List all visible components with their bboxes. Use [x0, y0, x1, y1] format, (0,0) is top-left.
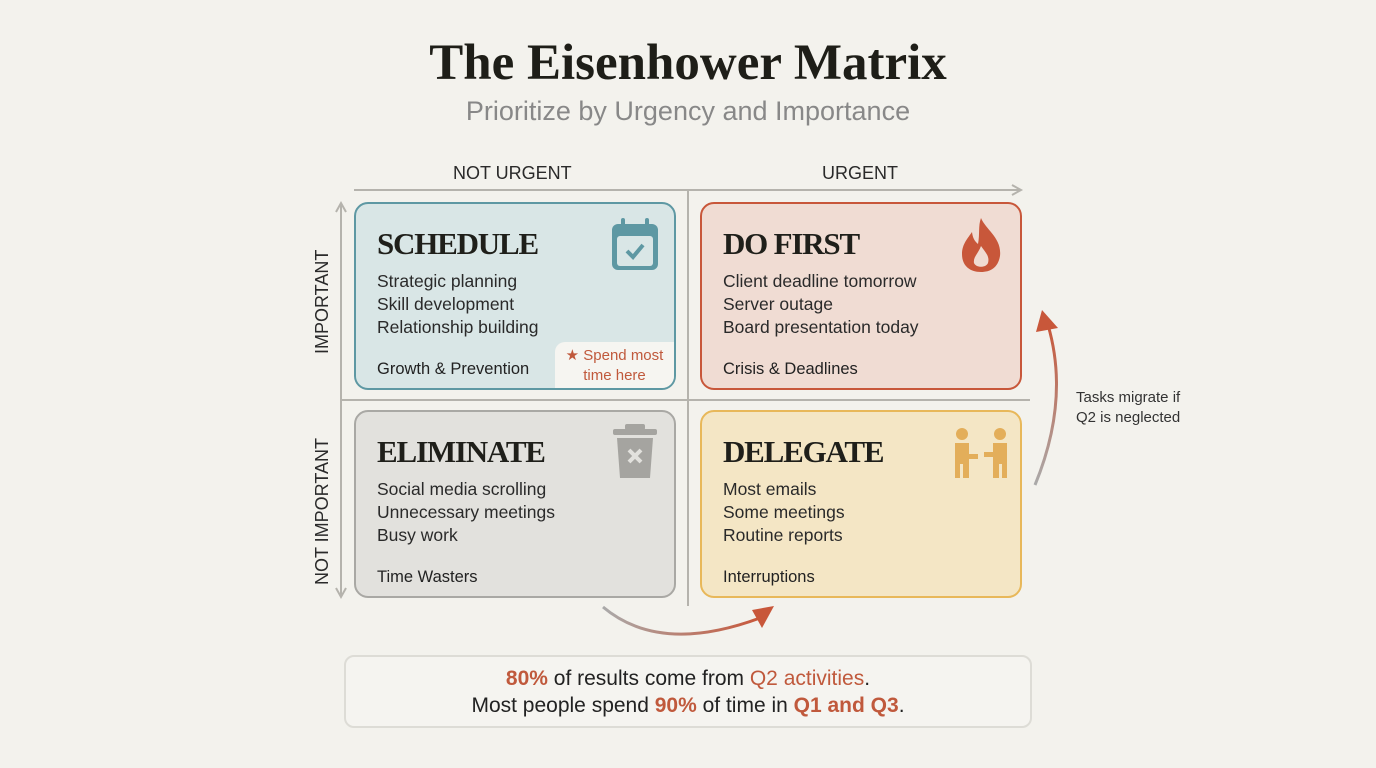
- panel: eliminate: Time Wasters: [377, 568, 478, 586]
- panel: eliminate: Busy work: [377, 525, 458, 545]
- panel: schedule: Growth & Prevention: [377, 360, 529, 378]
- panel: do first: [700, 202, 1022, 390]
- icon: people: [955, 428, 1007, 478]
- panel: do first: Client deadline tomorrow: [723, 271, 917, 291]
- bottom callout: 80% of results come from Q2 activities.: [506, 667, 870, 690]
- panel: do first: Board presentation today: [723, 317, 919, 337]
- panel: eliminate: Unnecessary meetings: [377, 502, 555, 522]
- panel: delegate: [700, 410, 1022, 598]
- callout: ★ Spend most: [566, 347, 663, 364]
- panel: eliminate: ELIMINATE: [377, 434, 545, 469]
- panel: delegate: Routine reports: [723, 525, 843, 545]
- panel: delegate: DELEGATE: [723, 434, 883, 469]
- subtitle: Prioritize by Urgency and Importance: [466, 96, 910, 126]
- title: The Eisenhower Matrix: [429, 35, 947, 91]
- bottom callout: Most people spend 90% of time in Q1 and Q3.: [471, 694, 905, 717]
- panel: do first: Server outage: [723, 294, 833, 314]
- callout: [555, 342, 674, 388]
- callout: time here: [583, 367, 646, 384]
- panel: eliminate: Social media scrolling: [377, 479, 546, 499]
- icon: calendar: [612, 218, 658, 270]
- arrow: eliminate to delegate: [603, 606, 774, 634]
- migrate note: [1076, 389, 1180, 426]
- panel: delegate: Interruptions: [723, 568, 815, 586]
- panel: eliminate: [354, 410, 676, 598]
- panel: schedule: Skill development: [377, 294, 514, 314]
- migrate note: Tasks migrate if: [1076, 389, 1180, 406]
- panel: delegate: Some meetings: [723, 502, 845, 522]
- text: NOT IMPORTANT: [312, 438, 332, 585]
- panel: schedule: Strategic planning: [377, 271, 517, 291]
- panel: delegate: Most emails: [723, 479, 816, 499]
- axis labels: NOT URGENT: [453, 163, 572, 183]
- migrate note: Q2 is neglected: [1076, 409, 1180, 426]
- panel: schedule: [354, 202, 676, 390]
- bottom callout: [344, 655, 1032, 728]
- panel: do first: DO FIRST: [723, 226, 859, 261]
- panel: do first: Crisis & Deadlines: [723, 360, 858, 378]
- panel: schedule: SCHEDULE: [377, 226, 538, 261]
- text: IMPORTANT: [312, 250, 332, 354]
- arrow: migrate to do first: [1035, 310, 1058, 485]
- icon: trash: [613, 424, 657, 478]
- icon: fire: [962, 218, 1000, 272]
- text: URGENT: [822, 163, 898, 183]
- panel: schedule: Relationship building: [377, 317, 538, 337]
